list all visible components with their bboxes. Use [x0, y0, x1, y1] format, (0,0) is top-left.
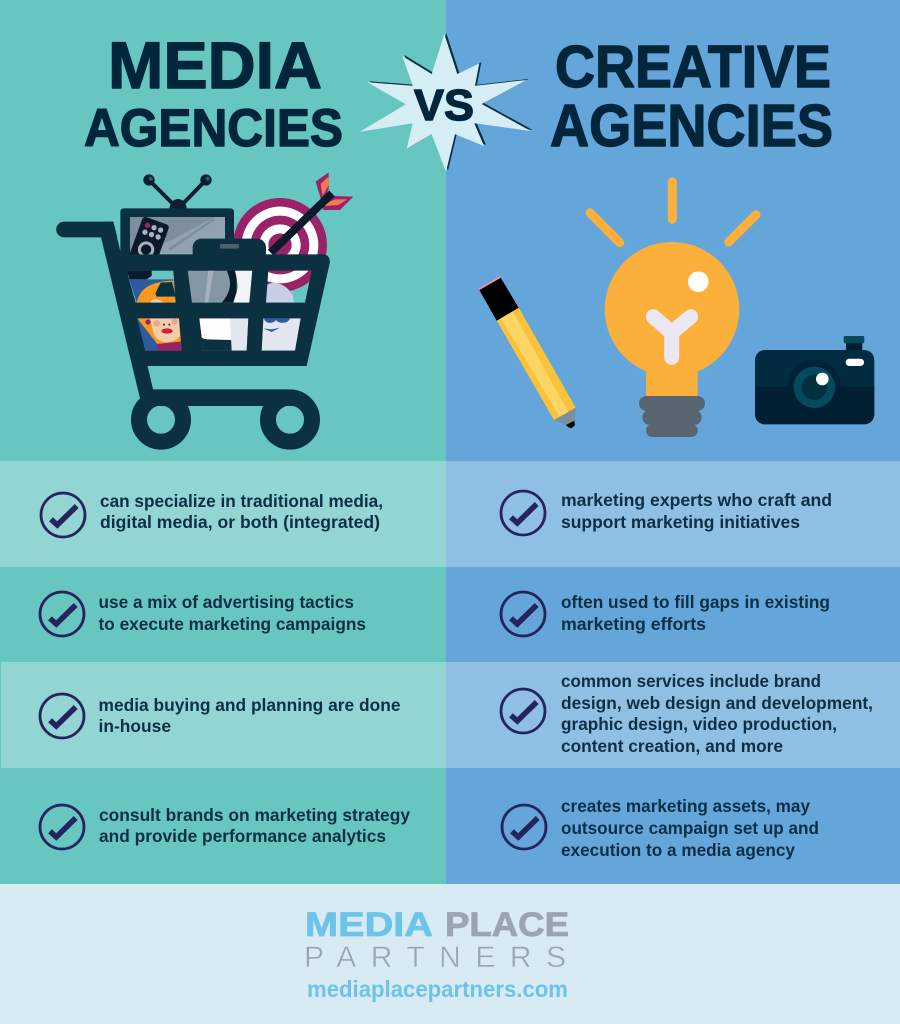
- logo: media place partners: PARTNERS: [304, 941, 566, 974]
- icon: check mark: [502, 805, 546, 849]
- heading: creative agencies: CREATIVE: [555, 34, 831, 100]
- footer panel: [0, 884, 900, 1024]
- bulb highlight: [688, 271, 709, 292]
- panel: creative row 3: [446, 662, 900, 768]
- text: media point 1: [100, 491, 383, 532]
- text: media point 1: can specialize in traditional media,: [100, 491, 383, 511]
- icon: target with arrow: [233, 172, 353, 292]
- badge: versus starburst: [360, 33, 533, 172]
- icon: check mark: [501, 689, 545, 733]
- illustration: shopping cart filled with media: [56, 172, 353, 442]
- panel: media row 2: [0, 567, 446, 662]
- text: creative point 4: creates marketing assets, may: [561, 796, 810, 816]
- panel: media row 4: [0, 768, 446, 884]
- panel: media agencies background: [0, 0, 446, 884]
- cart window contents, row two: portrait: [137, 318, 182, 351]
- text: media point 1: digital media, or both (integrated): [100, 512, 380, 532]
- text: creative point 3: graphic design, video production,: [561, 714, 837, 734]
- icon: smartphone: [193, 239, 266, 272]
- text: media point 2: [98, 592, 366, 634]
- logo: media place partners: [304, 906, 569, 974]
- icon: check mark: [41, 493, 85, 537]
- text: creative point 1: support marketing initiatives: [561, 512, 800, 532]
- panel: creative row 4: [446, 768, 900, 884]
- text: website: mediaplacepartners.com: [307, 976, 568, 1002]
- icon: right cart wheel: [268, 398, 312, 442]
- text: media point 4: and provide performance analytics: [99, 826, 386, 846]
- icon: check mark: [40, 694, 84, 738]
- illustration: pencil: [478, 276, 576, 428]
- icon: television: [120, 174, 234, 275]
- text: creative point 4: [561, 796, 819, 860]
- heading: media agencies: AGENCIES: [84, 99, 343, 158]
- icon: remote control: [124, 216, 170, 279]
- text: media point 4: [99, 805, 410, 846]
- icon: left cart wheel: [139, 398, 183, 442]
- text: media point 3: in-house: [98, 716, 171, 736]
- panel: creative row 1: [446, 461, 900, 567]
- text: creative point 4: outsource campaign set up and: [561, 818, 819, 838]
- text: creative point 3: [561, 671, 873, 756]
- icon: check mark: [40, 592, 84, 636]
- cart window contents, row two: paper and megaphone: [199, 318, 301, 351]
- panel: media row 3: [1, 662, 446, 768]
- bulb base: [639, 396, 705, 437]
- text: creative point 4: execution to a media agency: [561, 840, 795, 860]
- text: creative point 2: often used to fill gaps in existing: [561, 592, 830, 612]
- panel: media row 1: [0, 461, 446, 567]
- icon: check mark: [501, 491, 545, 535]
- bulb rays: [590, 182, 756, 243]
- illustration: light bulb: [590, 182, 756, 437]
- cart frame: [56, 222, 330, 442]
- icon: check mark: [40, 805, 84, 849]
- bulb glass: [605, 242, 739, 398]
- heading: creative agencies: AGENCIES: [550, 93, 833, 159]
- text: creative point 3: design, web design and development,: [561, 693, 873, 713]
- text: creative point 1: marketing experts who craft and: [561, 490, 832, 510]
- heading: media agencies: MEDIA: [108, 28, 322, 102]
- heading: media agencies: [84, 28, 343, 158]
- illustration: camera: [755, 336, 874, 424]
- badge: versus starburst: VS: [414, 81, 474, 130]
- icon: check mark: [501, 592, 545, 636]
- logo: media place partners: MEDIA: [305, 906, 433, 944]
- text: media point 2: use a mix of advertising tactics: [98, 592, 354, 612]
- bulb filament: [653, 317, 691, 357]
- text: media point 3: [98, 695, 401, 736]
- cart window contents, row one: [127, 271, 294, 303]
- text: media point 3: media buying and planning are done: [98, 695, 401, 715]
- text: media point 4: consult brands on marketing strategy: [99, 805, 410, 825]
- text: creative point 2: marketing efforts: [561, 614, 706, 634]
- panel: creative agencies background: [446, 0, 900, 884]
- panel: creative row 2: [446, 567, 900, 662]
- text: creative point 1: [561, 490, 832, 532]
- heading: creative agencies: [550, 34, 833, 159]
- text: creative point 3: content creation, and more: [561, 736, 783, 756]
- logo: media place partners: PLACE: [445, 906, 569, 944]
- text: creative point 2: [561, 592, 830, 634]
- text: creative point 3: common services include brand: [561, 671, 821, 691]
- text: media point 2: to execute marketing campaigns: [98, 614, 366, 634]
